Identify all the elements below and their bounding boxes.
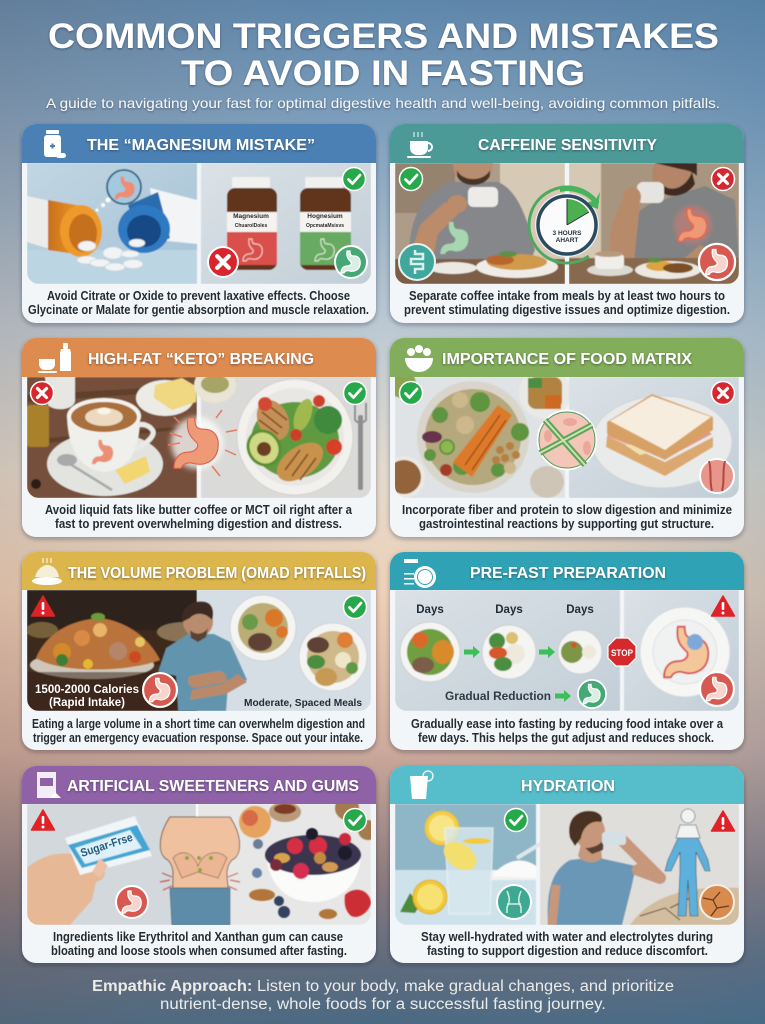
body text: magnesium: Avoid Citrate or Oxide to prevent laxative effects. Choose [47, 289, 350, 303]
image: man with coffee and meal, together [569, 153, 739, 284]
icon: plate and cutlery [404, 559, 436, 588]
panel: hydration [390, 766, 744, 963]
arrow: step two [539, 646, 555, 658]
panel header: volume [22, 552, 376, 590]
body text: caffeine [404, 289, 730, 317]
icon: shocked stomach [700, 672, 734, 706]
panel header: keto [22, 338, 376, 377]
clock: 3 hours apart: 3 HOURS [553, 230, 582, 237]
day labels: Days [566, 604, 594, 616]
icon: sweetener packet [37, 772, 61, 798]
packet label: Sugar-Frse [79, 832, 134, 860]
illustration: man holding stomach [158, 602, 247, 711]
calorie label: 1500-2000 Calories [35, 684, 139, 696]
image: empty plate with stomach [624, 590, 739, 711]
body text: food matrix: Incorporate fiber and protein to slow digestion and minimize [402, 503, 732, 517]
icon: cross [208, 247, 238, 277]
body text: magnesium: Glycinate or Malate for gentie absorption and muscle relaxation. [28, 303, 369, 317]
image: gradually shrinking meals [395, 590, 620, 711]
panel: importance of food matrix [383, 338, 744, 537]
image: sugar-free packet in hand [27, 804, 197, 925]
icon: check [400, 382, 422, 404]
panel header: food matrix [390, 338, 744, 377]
icon: check [342, 168, 366, 190]
body text: keto: fast to prevent overwhelming digestion and distress. [55, 517, 342, 531]
image: man drinking water [540, 804, 739, 925]
arrow: step one [464, 646, 480, 658]
icon: water glass [410, 771, 433, 799]
panel: the volume problem [22, 552, 376, 750]
body text: keto: Avoid liquid fats like butter coffee or MCT oil right after a [45, 503, 353, 517]
image: bloated torso [160, 804, 371, 925]
body text: keto [45, 503, 353, 531]
bottle label: magnesium citrate [233, 213, 269, 229]
image: salmon and grain bowl [395, 377, 569, 498]
panel: artificial sweeteners and gums [22, 766, 378, 963]
clock: 3 hours apart: AHART [556, 237, 578, 244]
heading: magnesium: THE “MAGNESIUM MISTAKE” [87, 137, 315, 154]
heading: volume: THE VOLUME PROBLEM (OMAD PITFALLS) [68, 565, 366, 582]
arrow: gradual reduction [555, 690, 571, 702]
title [48, 17, 719, 93]
panel header: hydration [390, 766, 744, 804]
icon: warning [32, 810, 54, 830]
title: TO AVOID IN FASTING [181, 54, 585, 93]
bottle label: magnesium citrate: ChuaroIDoles [235, 223, 267, 229]
icon: check [344, 382, 366, 404]
bottle label: magnesium citrate: Magnesium [233, 213, 269, 220]
image: spilled pill bottles [27, 163, 197, 284]
panel: caffeine sensitivity [390, 124, 744, 323]
icon: body balance [497, 885, 531, 919]
icon: cracked dry earth [700, 885, 734, 919]
footer note: Empathic Approach: Listen to your body, make gradual changes, and prioritize [92, 978, 674, 995]
icon: calm stomach [578, 680, 606, 708]
image: lemon water and electrolytes [395, 804, 550, 925]
icon: cross [712, 382, 734, 404]
icon: warning [32, 596, 54, 616]
heading: hydration: HYDRATION [521, 778, 615, 795]
calorie label [35, 684, 139, 709]
clock: 3 hours apart [514, 163, 620, 284]
heading: pre-fast: PRE-FAST PREPARATION [470, 565, 666, 582]
body text: pre-fast: Gradually ease into fasting by reducing food intake over a [411, 717, 724, 731]
icon: coffee and oil bottle [38, 343, 71, 373]
body text: caffeine: Separate coffee intake from meals by at least two hours to [409, 289, 725, 303]
heading: sweeteners: ARTIFICIAL SWEETENERS AND GUMS [67, 778, 359, 795]
day labels: Days [416, 604, 444, 616]
body text: food matrix: gastrointestinal reactions by supporting gut structure. [419, 517, 714, 531]
footer note: nutrient-dense, whole foods for a successful fasting journey. [160, 996, 606, 1013]
body text: pre-fast [411, 717, 724, 745]
icon: check [344, 808, 366, 832]
icon: cross [30, 382, 54, 404]
icon: cross [712, 168, 734, 190]
footer note [92, 978, 674, 1013]
body text: pre-fast: few days. This helps the gut adjust and reduces shock. [418, 731, 714, 745]
image: butter coffee [27, 377, 197, 498]
icon: overloaded stomach [143, 673, 177, 707]
icon: bloated stomach [116, 886, 148, 918]
icon: check [344, 596, 366, 618]
icon: heaped plate [32, 558, 62, 585]
body text: volume: Eating a large volume in a short time can overwhelm digestion and [32, 717, 365, 731]
subtitle: A guide to navigating your fast for optimal digestive health and well-being, avoiding common pitfalls. [46, 95, 720, 111]
panel: pre-fast preparation [390, 552, 744, 750]
image: man with coffee and meal, spaced [395, 163, 565, 284]
heading: caffeine: CAFFEINE SENSITIVITY [478, 137, 658, 154]
day labels [416, 604, 594, 616]
icon: check [504, 808, 528, 832]
panel header: pre-fast [390, 552, 744, 590]
body text: sweeteners [51, 930, 347, 958]
icon: supplement bottle [44, 130, 66, 158]
icon: irritated gut [700, 459, 734, 493]
icon: salad bowl [405, 345, 433, 372]
bottle label: magnesium glycinate: OpcmataMsisvs [306, 223, 344, 229]
bottle label: magnesium glycinate: Hognesium [307, 213, 343, 220]
icon: healthy gut [399, 244, 435, 280]
image: white-bread sandwich [569, 377, 739, 498]
image: huge meal and bloated man [26, 590, 213, 711]
body text: sweeteners: Ingredients like Erythritol and Xanthan gum can cause [53, 930, 343, 944]
panel header: magnesium [22, 124, 376, 163]
body text: sweeteners: bloating and loose stools when consumed after fasting. [51, 944, 347, 958]
label: moderate meals: Moderate, Spaced Meals [244, 697, 362, 709]
icon: stop sign [608, 638, 636, 666]
image: berries and nuts bowl [239, 796, 378, 919]
label: gradual reduction: Gradual Reduction [445, 689, 551, 703]
icon: warning [712, 596, 734, 616]
bottle label: magnesium glycinate [306, 213, 344, 229]
day labels: Days [495, 604, 523, 616]
image: chicken and avocado plate [194, 367, 371, 498]
icon: stop sign: STOP [611, 648, 634, 659]
body text: magnesium [28, 289, 369, 317]
title: COMMON TRIGGERS AND MISTAKES [48, 17, 719, 56]
heading: keto: HIGH-FAT “KETO” BREAKING [88, 351, 314, 368]
body text: hydration [421, 930, 713, 958]
body text: volume: trigger an emergency evacuation response. Space out your intake. [33, 731, 363, 745]
icon: warning [712, 811, 734, 831]
body text: volume [32, 717, 365, 745]
image: magnesium bottles comparison [201, 163, 371, 284]
panel: high-fat keto breaking [22, 338, 376, 537]
panel header: sweeteners [22, 766, 376, 804]
icon: fiber and gut structure [538, 411, 596, 469]
icon: check [400, 168, 422, 190]
panel header: caffeine [390, 124, 744, 163]
calorie label: (Rapid Intake) [49, 697, 125, 709]
icon: healthy stomach [335, 246, 367, 278]
panel: the magnesium mistake [22, 124, 376, 323]
image: spaced moderate meals [197, 590, 371, 711]
body text: hydration: fasting to support digestion and reduce discomfort. [427, 944, 708, 958]
icon: irritated stomach [168, 410, 237, 476]
heading: food matrix: IMPORTANCE OF FOOD MATRIX [442, 351, 693, 368]
icon: upset stomach [699, 244, 735, 280]
body text: hydration: Stay well-hydrated with water and electrolytes during [421, 930, 713, 944]
body text: caffeine: prevent stimulating digestive issues and optimize digestion. [404, 303, 730, 317]
body text: food matrix [402, 503, 732, 531]
icon: coffee cup [407, 132, 432, 158]
